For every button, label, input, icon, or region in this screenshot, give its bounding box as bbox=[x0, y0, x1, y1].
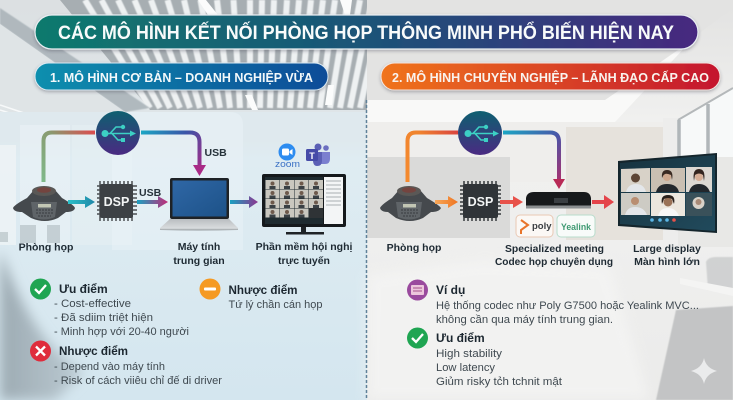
icon: DSP chip bbox=[460, 181, 501, 221]
text block: Nhược điểm: - Depend vào máy tính bbox=[54, 361, 165, 373]
label: Máy tính trung gian: Máy tính bbox=[178, 241, 220, 253]
text block: Nhược điểm: Nhược điểm bbox=[59, 344, 128, 358]
text block: Ưu điểm: - Cost-effective bbox=[54, 298, 131, 310]
arrow: codec to display bbox=[592, 195, 614, 209]
title banner: CÁC MÔ HÌNH KẾT NỐI PHÒNG HỌP THÔNG MINH PHỔ BIẾN HIỆN NAY bbox=[58, 20, 674, 44]
section header: model 1: 1. MÔ HÌNH CƠ BẢN – DOANH NGHIỆP VỪA bbox=[50, 70, 314, 85]
text block: Nhược điểm neutral: Nhược điểm bbox=[228, 283, 298, 297]
icon: Teams logo bbox=[306, 144, 330, 166]
section header: model 2: 2. MÔ HÌNH CHUYÊN NGHIỆP – LÃNH ĐẠO CẤP CAO bbox=[392, 70, 709, 85]
text block: Ưu điểm: High stability bbox=[436, 348, 503, 360]
arrow: laptop to monitor bbox=[230, 196, 258, 208]
text block: Nhược điểm neutral bbox=[228, 283, 322, 311]
icon: Zoom logo bbox=[275, 144, 300, 170]
label: Large display: Màn hình lớn bbox=[634, 256, 700, 268]
icon: Poly logo: poly bbox=[532, 221, 552, 232]
arrow: speakerphone to DSP bbox=[435, 196, 458, 208]
icon: speakerphone bbox=[380, 186, 441, 221]
section header: model 1 bbox=[35, 63, 328, 90]
icon: green check bbox=[407, 328, 428, 348]
person tiles bbox=[625, 169, 710, 216]
diagram: model 2 bbox=[380, 111, 717, 268]
background: left office bbox=[0, 0, 384, 400]
icon: red cross bbox=[30, 340, 51, 362]
panel: model 1 pros and cons bbox=[30, 278, 322, 387]
text block: Ưu điểm: - Đã sdiim triệt hiện bbox=[54, 312, 153, 324]
icon: Teams logo: T bbox=[309, 151, 315, 161]
icon: Yealink logo bbox=[557, 215, 595, 237]
text block: Ưu điểm: Ưu điểm bbox=[436, 331, 485, 345]
title banner bbox=[35, 15, 698, 49]
arrow: USB hub to codec bbox=[503, 132, 565, 189]
label: USB horizontal: USB bbox=[139, 187, 162, 199]
icon: DSP chip: DSP bbox=[468, 195, 493, 209]
text block: Ví dụ: Ví dụ bbox=[436, 283, 465, 297]
label: Phần mềm hội nghị trực tuyến: Phần mềm hội nghị bbox=[256, 241, 352, 253]
text block: Ưu điểm: Ưu điểm bbox=[59, 282, 108, 296]
panel: model 2 example and pros bbox=[407, 280, 699, 388]
icon: USB hub bbox=[458, 111, 502, 155]
text block: Ưu điểm bbox=[436, 331, 562, 388]
text block: Ưu điểm bbox=[54, 282, 189, 338]
text block: Nhược điểm bbox=[54, 344, 222, 387]
icon: large display bbox=[618, 153, 717, 233]
arrow: USB hub to laptop bbox=[141, 132, 206, 176]
section header: model 2 bbox=[381, 63, 720, 90]
text block: Ưu điểm: Giủm risky tc̉h tchnit mật bbox=[436, 376, 562, 388]
label: USB vertical: USB bbox=[204, 147, 227, 159]
icon: green check bbox=[30, 278, 51, 300]
arrow: DSP to codec bbox=[500, 196, 523, 208]
icon: USB hub bbox=[96, 111, 140, 155]
arrow: speakerphone to USB hub bbox=[408, 132, 458, 182]
icon: monitor with video conference bbox=[262, 174, 346, 234]
icon: DSP chip bbox=[97, 181, 137, 221]
text block: Ví dụ: không cần qua máy tính trung gian. bbox=[436, 314, 613, 326]
icon: codec device bbox=[526, 192, 591, 208]
icon: Zoom logo: zoom bbox=[275, 159, 300, 170]
arrow: speakerphone to DSP bbox=[68, 196, 95, 208]
icon: Poly logo bbox=[516, 215, 553, 237]
label: Large display: Large display bbox=[633, 243, 701, 255]
text block: Nhược điểm neutral: Tứ lý chần cán họp bbox=[228, 299, 322, 311]
icon: laptop bbox=[160, 178, 238, 230]
text block: Ưu điểm: - Minh hợp với 20-40 người bbox=[54, 326, 189, 338]
center dashed divider bbox=[366, 100, 368, 400]
arrow: DSP to laptop bbox=[137, 196, 168, 208]
icon: sparkle watermark bbox=[691, 358, 717, 384]
label: Máy tính trung gian: trung gian bbox=[173, 255, 225, 267]
text block: Nhược điểm: - Risk of cách viiêu chỉ đế di driver bbox=[54, 375, 222, 387]
label: Phòng họp: Phòng họp bbox=[387, 242, 441, 254]
label: Specialized meeting codec: Codec họp chuyên dụng bbox=[495, 256, 613, 268]
text block: Ví dụ bbox=[436, 283, 699, 326]
text block: Ví dụ: Hệ thống codec như Poly G7500 hoặc Yealink MVC... bbox=[436, 300, 699, 312]
arrow: speakerphone to USB hub bbox=[44, 132, 95, 182]
label: Phòng họp: Phòng họp bbox=[19, 242, 73, 254]
icon: orange minus bbox=[200, 278, 220, 300]
icon: example bbox=[407, 280, 428, 300]
icon: DSP chip: DSP bbox=[104, 195, 129, 209]
label: Specialized meeting codec: Specialized meeting bbox=[505, 243, 604, 255]
diagram: model 1 bbox=[13, 111, 352, 267]
icon: speakerphone bbox=[13, 186, 75, 221]
icon: Yealink logo: Yealink bbox=[561, 222, 592, 233]
label: Phần mềm hội nghị trực tuyến: trực tuyến bbox=[278, 255, 330, 267]
text block: Ưu điểm: Low latency bbox=[436, 362, 496, 374]
background: right room bbox=[367, 0, 733, 400]
